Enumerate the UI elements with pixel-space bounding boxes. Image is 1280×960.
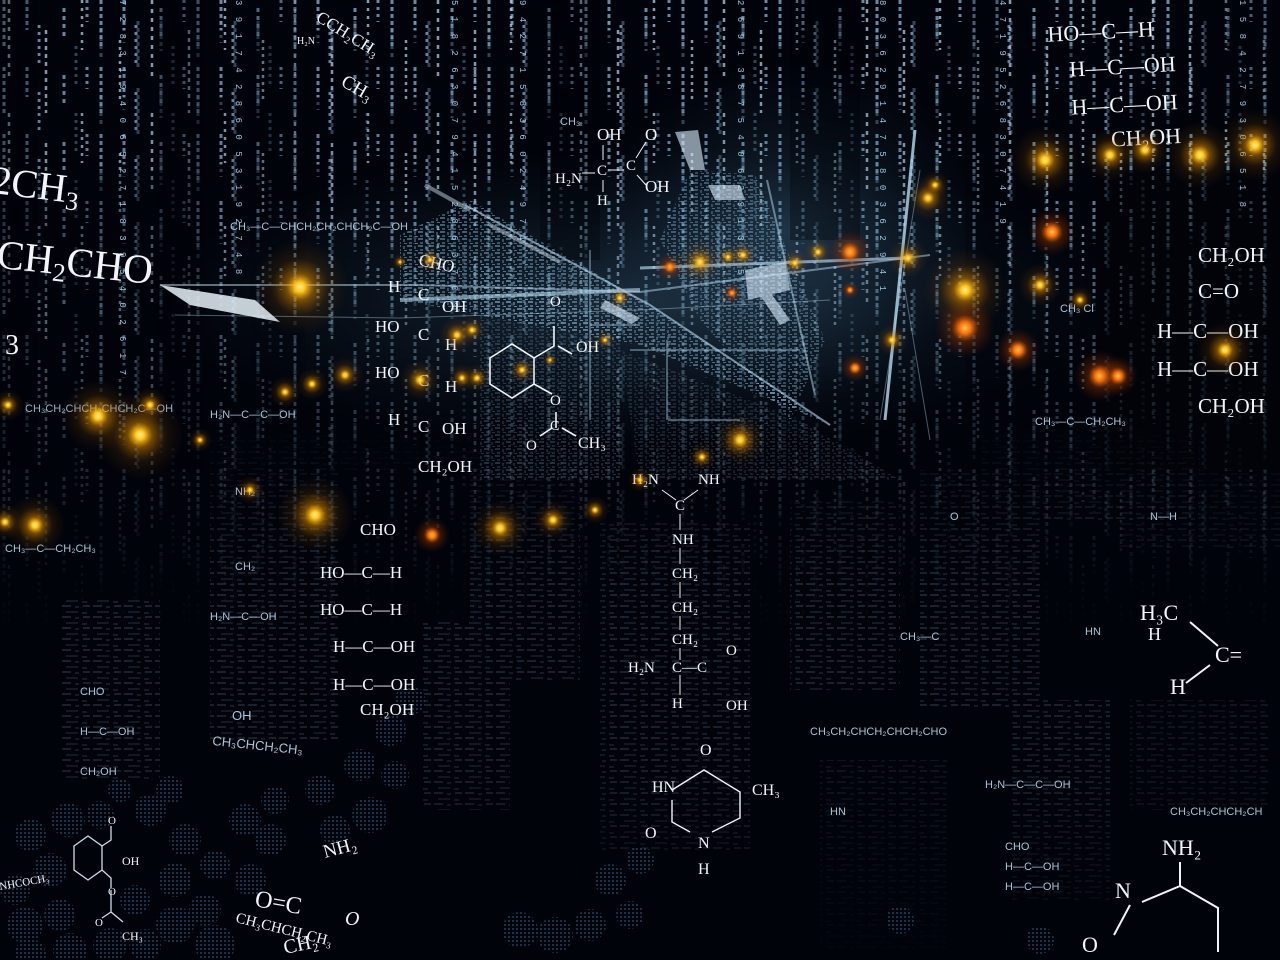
sugar chain lower centre: CH₂OH [360,700,414,719]
small formula scatter: H₂N—C—C—OH [985,779,1071,791]
sugar chain centre: HO [375,363,400,382]
lower left molecules: NH₂ [321,834,359,863]
sugar chain centre: CHO [417,250,456,276]
lower left molecules: O [108,886,116,898]
top formula: CH₃ [338,71,377,106]
aspirin molecule [490,294,606,454]
digit columns [117,0,1247,378]
glucose chain top right: H—C—OH [1069,51,1176,82]
sugar chain centre [375,250,472,476]
amino acid top centre: O [645,125,657,144]
small formula scatter: CH₃—C—CH₂CH₃ [5,543,96,555]
thymine molecule: CH₃ [752,782,780,799]
arginine formula: CH₂ [672,566,698,582]
aspirin molecule: OH [576,339,600,356]
propene formula: H₃C [1140,600,1178,625]
small formula scatter: NH₂ [235,486,255,498]
thymine molecule: O [700,742,712,759]
small formula scatter: CH₃—C—CHCH₂CH₂CHCH₂C—OH [230,221,408,233]
sugar chain right: CH₂OH [1198,243,1265,267]
sugar chain centre: OH [442,419,467,438]
digit columns: 8 0 3 6 2 9 1 4 7 5 8 0 3 6 2 9 4 1 [877,0,887,294]
aspirin molecule: O [526,438,537,454]
sugar chain right: H—C—OH [1157,319,1259,343]
small formula scatter: H—C—OH [1005,881,1059,893]
thymine molecule [645,742,780,878]
sugar chain right: H—C—OH [1157,357,1259,381]
small formula scatter: CH₂OH [80,766,117,778]
amino acid top centre: OH [597,125,622,144]
large left formulas: 3 [64,186,80,216]
sugar chain centre: C [418,417,429,436]
small formula scatter: CHO [80,686,105,698]
digit columns: 9 4 2 7 1 5 8 3 6 0 2 4 9 7 1 [517,0,527,244]
arginine formula: C [675,498,685,514]
sugar chain lower centre: H—C—OH [333,637,415,656]
digit columns: 1 5 8 4 2 7 9 3 0 6 5 1 8 [1237,0,1247,210]
thymine molecule: H [698,861,710,878]
small formula scatter: CH₃CH₂CHCH₂CHCH₂C—OH [25,403,173,415]
digit columns: 2 6 9 1 3 8 7 5 4 0 6 2 9 1 3 8 5 [735,0,745,277]
top formula [297,7,383,106]
small formula scatter: H₂N—C—OH [210,611,277,623]
sugar chain right: CH₂OH [1198,394,1265,418]
sugar chain centre: H [388,277,400,296]
large left formulas: 3 [5,330,19,361]
sugar chain lower centre [320,520,415,719]
glucose chain top right: HO—C—H [1047,16,1154,47]
lower left molecules: CH₃ [122,929,143,943]
amino acid top centre: C [626,158,636,174]
arginine formula: NH [698,472,720,488]
lower left molecules: CH₂ [281,930,320,959]
digit columns: 5 1 8 2 6 3 0 7 9 4 1 5 2 8 6 3 7 0 9 [449,0,459,311]
sugar chain centre: CH₂OH [418,457,472,476]
sugar chain right [1157,243,1265,418]
sugar chain centre: C [418,371,429,390]
sugar chain centre: H [445,377,457,396]
arginine formula: C—C [672,660,707,676]
arginine formula: CH₂ [672,632,698,648]
cytosine molecule: N [1115,878,1131,903]
sugar chain centre: H [445,335,457,354]
propene formula: C= [1215,642,1242,667]
sugar chain lower centre: HO—C—H [320,563,402,582]
small formula scatter [5,116,1263,893]
lower left molecules: O [345,908,359,930]
amino acid top centre: C [597,163,607,179]
small formula scatter: HN [830,806,846,818]
falling digit rain [2,0,1266,597]
sugar chain lower centre: HO—C—H [320,600,402,619]
crystalline light panels [160,130,930,480]
sugar chain centre: OH [442,297,467,316]
small formula scatter: O [950,511,959,523]
top formula: CCH₂CH₃ [313,7,383,61]
sugar chain right: C=O [1198,279,1239,303]
small formula scatter: CH₃CHCH₂CH₃ [212,733,304,757]
glucose chain top right [1047,15,1182,155]
small formula scatter: CH₃CH₂CHCH₂CHCH₂CHO [810,726,948,738]
glucose chain top right: CH₂OH [1110,123,1182,152]
cytosine molecule: NH₂ [1162,835,1201,860]
small formula scatter: N—H [1150,511,1177,523]
arginine formula [628,472,748,714]
glowing orange light chain [0,109,1280,556]
clusters of dotted cubes [0,685,1054,960]
digit columns: 3 9 1 7 4 2 8 6 0 5 3 1 9 2 7 4 8 [233,0,243,277]
sugar chain centre: C [418,285,429,304]
arginine formula: O [726,643,737,659]
small formula scatter: H—C—OH [1005,861,1059,873]
arginine formula: OH [726,698,748,714]
small formula scatter: OH [232,708,252,723]
propene formula: H [1148,624,1161,644]
small formula scatter: CH₃CH₂CHCH₂CH [1170,806,1263,818]
amino acid top centre: H [597,193,608,209]
sugar chain centre: HO [375,317,400,336]
arginine formula: NH [672,532,694,548]
digit columns: 4 7 1 9 5 2 6 8 3 0 7 4 1 9 [997,0,1007,227]
top formula: H₂N [297,36,315,47]
large left formulas [0,157,155,361]
small formula scatter: CHO [1005,841,1030,853]
small formula scatter: H₂N—C—C—OH [210,409,296,421]
large left formulas: 2 [51,258,67,288]
thymine molecule: O [645,825,657,842]
lower field of tiny formula columns [62,462,1280,900]
propene formula: H [1170,674,1186,699]
amino acid top centre: H₂N [555,171,582,187]
sugar chain centre: H [388,410,400,429]
small formula scatter: HN [1085,626,1101,638]
sugar chain centre: C [418,325,429,344]
digit columns: 7 2 8 3 1 9 4 0 6 5 2 7 1 8 3 9 5 4 0 2 6 1 7 [117,0,127,378]
arginine formula: H₂N [628,660,655,676]
large left formulas: CHO [64,238,155,293]
small formula scatter: CH₃—C—CH₂CH₃ [1035,416,1126,428]
blue haze behind the data rain [160,60,1120,450]
aspirin molecule: O [550,393,561,409]
lower left molecules: CH₃CHCH₂CH₃ [234,910,334,950]
aspirin molecule: CH₃ [578,435,606,452]
sugar chain lower centre: H—C—OH [333,675,415,694]
amino acid top centre: OH [645,177,670,196]
small formula scatter: CH₂ [235,561,255,573]
sugar chain lower centre: CHO [360,520,396,539]
thymine molecule: N [698,835,710,852]
irregular darker gaps in the rain [0,0,1280,470]
small formula scatter: H—C—OH [80,726,134,738]
lower left molecules: OH [122,854,140,868]
aspirin molecule: C [550,419,559,434]
lower left molecules: O [95,917,103,929]
arginine formula: H [672,696,683,712]
propene formula [1140,600,1242,699]
small formula scatter: CH₃ Cl [1060,303,1094,315]
lower left molecules: O=C [253,886,304,920]
lower left molecules [0,815,359,959]
amino acid top centre [555,125,670,209]
arginine formula: CH₂ [672,600,698,616]
small formula scatter: CH₃ [560,116,580,128]
aspirin molecule: O [550,294,561,310]
lower left molecules: O [108,815,116,827]
arginine formula: H₂N [632,472,659,488]
thymine molecule: HN [652,779,676,796]
small formula scatter: CH₃—C [900,631,939,643]
cytosine molecule: O [1082,932,1098,957]
glucose chain top right: H—C—OH [1071,89,1178,120]
cytosine molecule [1082,835,1218,957]
